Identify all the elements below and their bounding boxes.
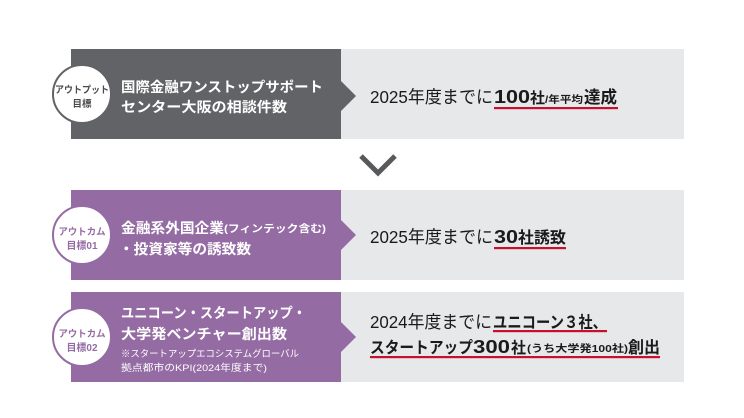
note: KPI footnote: 拠点都市のKPI(2024年度まで) [121, 362, 267, 374]
badge: output goal [53, 65, 111, 123]
target text: output: 2025年度までに [370, 87, 493, 107]
heading: outcome 02 metric [121, 305, 306, 343]
arrow: chevron down [361, 156, 395, 173]
target text: output: 100 [494, 86, 530, 107]
panel: output goal [53, 49, 684, 139]
heading: outcome 01 metric: 金融系外国企業 [121, 219, 225, 237]
heading: output metric [121, 78, 323, 116]
target text: output: /年平均 [545, 93, 583, 106]
target text: outcome 01: 30 [494, 226, 518, 247]
target text: outcome 02: ユニコーン３社、 [493, 313, 607, 332]
heading: outcome 02 metric: 大学発ベンチャー創出数 [121, 325, 288, 343]
panel: outcome goal 02 [53, 292, 684, 382]
outcome 02 label bar [71, 292, 356, 382]
target text: outcome 02: スタートアップ [370, 339, 473, 357]
badge: outcome goal 02: 目標02 [66, 341, 98, 354]
badge: output goal: アウトプット [55, 85, 109, 96]
badge: outcome goal 02 [53, 308, 111, 366]
target text: outcome 01: 社誘致 [518, 229, 566, 247]
target text: outcome 02: 300 [473, 336, 510, 357]
target text: outcome 01 [370, 226, 566, 249]
target text: outcome 02: (うち大学発100社) [527, 342, 628, 355]
heading: output metric: センター大阪の相談件数 [121, 98, 288, 116]
heading: outcome 01 metric [119, 219, 326, 258]
target text: output [370, 86, 618, 109]
panel: outcome goal 01 [53, 190, 684, 280]
note: KPI footnote [121, 348, 299, 374]
badge: outcome goal 01: アウトカム [58, 227, 106, 238]
target text: outcome 02: 創出 [628, 338, 660, 357]
target text: outcome 02: 社 [511, 339, 526, 357]
badge: outcome goal 01: 目標01 [66, 239, 98, 252]
badge: outcome goal 02: アウトカム [58, 329, 106, 340]
target text: output: 社 [530, 90, 545, 107]
note: KPI footnote: ※スタートアップエコシステムグローバル [121, 348, 299, 360]
outcome 01 label bar [71, 190, 356, 280]
output label bar [71, 49, 356, 139]
heading: outcome 01 metric: (フィンテック含む) [224, 222, 326, 235]
target text: outcome 01: 2025年度までに [370, 227, 493, 247]
badge: outcome goal 01 [53, 206, 111, 264]
target text: outcome 02: 2024年度までに [370, 312, 492, 332]
target text: outcome 02 [370, 312, 660, 358]
target text: output: 達成 [584, 87, 617, 107]
heading: outcome 02 metric: ユニコーン・スタートアップ・ [121, 305, 306, 322]
heading: outcome 01 metric: ・投資家等の誘致数 [119, 240, 252, 258]
heading: output metric: 国際金融ワンストップサポート [121, 78, 323, 96]
badge: output goal: 目標 [72, 98, 92, 110]
